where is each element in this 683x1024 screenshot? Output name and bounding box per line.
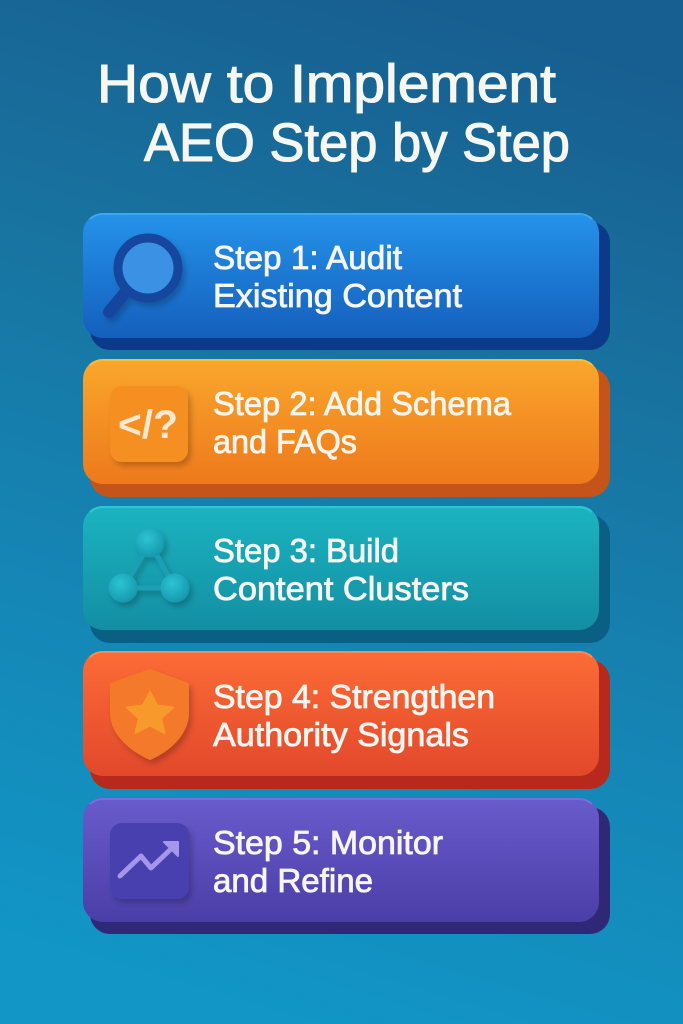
- text: step 5: and Refine: [213, 862, 373, 899]
- title: AEO Step by Step: [144, 113, 570, 173]
- text: step 4: Step 4: Strengthen: [213, 678, 495, 715]
- icon: magnifying glass: [109, 238, 178, 312]
- text: step 3: Content Clusters: [213, 570, 469, 607]
- text: step 4: [213, 678, 495, 753]
- text: step 3: Step 3: Build: [213, 532, 399, 569]
- text: step 2: Step 2: Add Schema: [213, 385, 512, 422]
- icon: rising trend arrow tile: [110, 823, 189, 899]
- panel: step 2: [83, 359, 610, 497]
- text: step 4: Authority Signals: [213, 716, 469, 753]
- icon: shield with star: [111, 670, 188, 759]
- icon: code and question tile: [110, 386, 188, 462]
- panel: step 1: [83, 213, 610, 350]
- text: step 5: [213, 824, 443, 899]
- panel: step 4: [83, 651, 610, 789]
- text: step 2: [213, 385, 512, 460]
- panel: step 3: [83, 506, 610, 643]
- text: step 1: Existing Content: [213, 277, 462, 314]
- title: [97, 54, 570, 173]
- title: How to Implement: [97, 54, 556, 114]
- text: step 3: [213, 532, 469, 607]
- icon: connected nodes: [108, 528, 190, 602]
- icon: code and question tile: </?: [118, 403, 178, 447]
- text: step 1: Step 1: Audit: [213, 239, 402, 276]
- text: step 1: [213, 239, 462, 314]
- panel: step 5: [83, 798, 610, 934]
- text: step 5: Step 5: Monitor: [213, 824, 443, 861]
- text: step 2: and FAQs: [213, 423, 357, 460]
